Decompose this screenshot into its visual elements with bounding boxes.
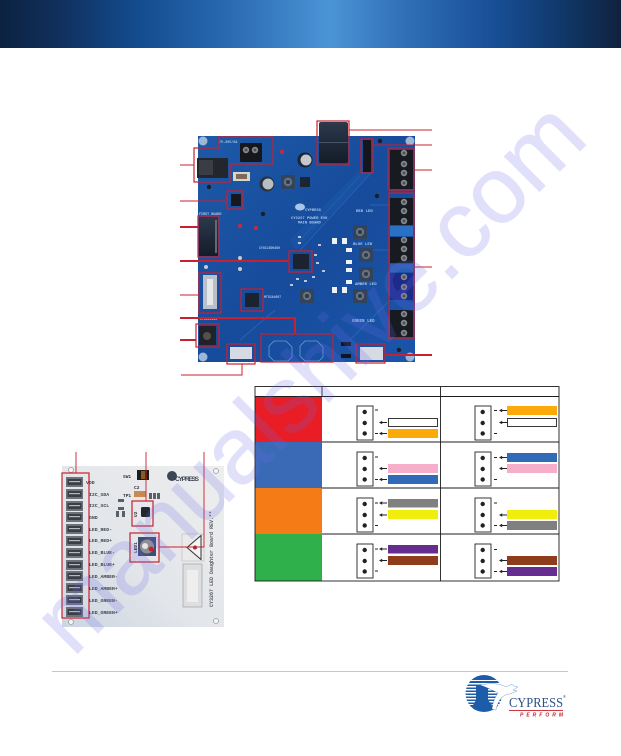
small jumpers	[341, 342, 351, 358]
pin dashes	[375, 410, 497, 572]
switch SW1: SW1	[123, 474, 131, 480]
connector labels: LED_AMBER+	[89, 586, 118, 592]
board silkscreen: MTSCA4097	[264, 295, 281, 299]
Cypress mini logo	[167, 471, 200, 483]
terminal block input	[240, 143, 262, 162]
sensor U2: U2	[133, 511, 139, 517]
board silkscreen: CY8C22345	[200, 317, 217, 321]
capacitor C2	[123, 485, 146, 499]
white connectors	[230, 347, 383, 360]
Cypress logo	[465, 675, 566, 718]
header pins	[363, 140, 371, 172]
switch SW1	[123, 470, 149, 480]
component cluster	[290, 236, 325, 286]
wordmark: CYPRESS	[509, 695, 563, 710]
connector labels: LED_BLUE+	[89, 562, 115, 568]
daughter board photo	[62, 466, 224, 627]
connector labels: LED_RED+	[89, 538, 112, 544]
connector labels: I2C_SCL	[89, 503, 109, 509]
inductors and power ICs	[281, 175, 373, 303]
pin arrows	[379, 409, 507, 573]
mounting holes	[198, 136, 414, 362]
board silkscreen: MAIN BOARD	[298, 222, 322, 226]
connector column	[66, 477, 83, 617]
bird	[480, 684, 518, 710]
LED1	[133, 537, 156, 556]
connector labels: LED_GREEN-	[89, 598, 118, 604]
board silkscreen: CY3267 POWER EVK	[291, 217, 328, 221]
large left connector	[199, 217, 218, 256]
capacitor C2: C2	[134, 485, 140, 491]
color swatches	[255, 396, 322, 581]
white ribbon header	[203, 275, 217, 309]
connector labels: LED_RED-	[89, 527, 112, 533]
small SMD parts	[116, 493, 160, 517]
board silkscreen: 7V-20V/6A	[219, 140, 238, 145]
fuse	[233, 172, 250, 181]
reset and color buttons	[269, 341, 323, 361]
board name: CY3267 LED Daughter Board REV.**	[209, 511, 215, 607]
potentiometer	[199, 326, 216, 345]
warning label	[183, 564, 202, 607]
terminal blocks	[390, 150, 413, 337]
test points	[204, 139, 401, 352]
red callouts: daughter board	[62, 452, 204, 618]
connector labels: LED_BLUE-	[89, 550, 115, 556]
connector labels	[86, 480, 118, 616]
warning triangle panel	[182, 534, 204, 561]
board silkscreen: AMBER LED	[355, 283, 377, 287]
board silkscreen: BLUE LED	[353, 243, 373, 247]
logo on board	[295, 204, 305, 210]
pin headers	[357, 406, 491, 578]
header band	[0, 0, 621, 48]
capacitors	[260, 152, 312, 192]
Cypress logo: ®	[563, 694, 566, 699]
connector labels: VDD	[86, 480, 95, 486]
watermark: manualshive.com	[13, 81, 604, 672]
leader lines: main board left	[180, 165, 295, 375]
LED1: LED1	[133, 542, 139, 553]
globe	[465, 675, 503, 712]
leader lines: main board right	[349, 130, 432, 355]
DC power jack	[197, 158, 228, 178]
connector labels: LED_AMBER-	[89, 574, 118, 580]
footer rule	[52, 671, 568, 672]
jumper	[231, 194, 241, 206]
board silkscreen: RED LED	[356, 210, 373, 214]
connector labels: LED_GREEN+	[89, 610, 118, 616]
sensor U2	[133, 507, 150, 517]
board silkscreen: CYPRESS	[305, 209, 322, 213]
board silkscreen	[199, 140, 377, 324]
second chip	[245, 293, 259, 307]
top connector	[319, 122, 348, 163]
Cypress logo: PERFORM	[520, 712, 564, 718]
table grid	[255, 386, 559, 581]
board silkscreen: GREEN LED	[352, 320, 375, 324]
red callout outlines: main board	[194, 121, 414, 364]
Cypress mini logo: CYPRESS	[175, 476, 200, 483]
main board photo	[197, 122, 415, 362]
mounting holes	[68, 468, 218, 624]
board silkscreen: CY8CLED04D0	[259, 246, 280, 250]
wire colour bars	[388, 406, 557, 576]
PSoC MCU chip	[293, 254, 309, 269]
board silkscreen: FIRST BOARD	[199, 213, 221, 217]
connector labels: I2C_SDA	[89, 492, 109, 498]
connector labels: GND	[89, 515, 98, 521]
wiring table	[255, 386, 559, 581]
capacitor C2: TP1	[123, 493, 131, 499]
LED pads	[332, 238, 352, 293]
